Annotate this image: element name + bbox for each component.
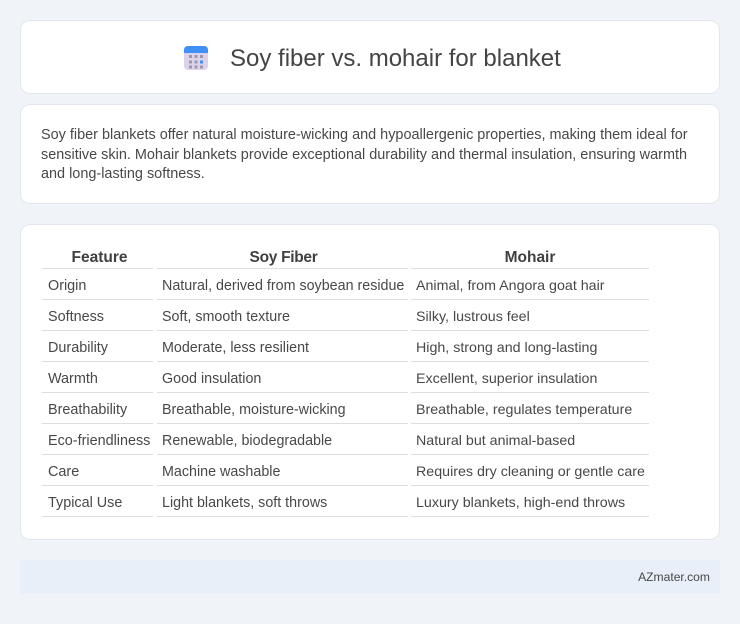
- row: Typical Use: Typical Use: [48, 495, 122, 511]
- row: Softness: [42, 309, 649, 331]
- row: Origin: Natural, derived from soybean residue: [162, 278, 404, 294]
- row: Warmth: Good insulation: [162, 371, 261, 387]
- row: Eco-friendliness: Renewable, biodegradable: [162, 433, 332, 449]
- row: Breathability: Breathable, regulates temperature: [416, 402, 632, 418]
- table header: Soy Fiber: [250, 249, 317, 266]
- row: Care: Care: [48, 464, 79, 480]
- table header: Mohair: [505, 249, 555, 266]
- table header: [42, 249, 649, 269]
- panel: title card: [20, 20, 720, 94]
- row: Softness: Softness: [48, 309, 104, 325]
- row: Origin: Origin: [48, 278, 86, 294]
- table header: Feature: [72, 249, 128, 266]
- row: Durability: [42, 340, 649, 362]
- row: Origin: [42, 278, 649, 300]
- row: Durability: Moderate, less resilient: [162, 340, 309, 356]
- row: Warmth: Excellent, superior insulation: [416, 371, 597, 387]
- row: Durability: Durability: [48, 340, 108, 356]
- row: Durability: High, strong and long-lasting: [416, 340, 597, 356]
- row: Typical Use: Luxury blankets, high-end throws: [416, 495, 625, 511]
- row: Eco-friendliness: Natural but animal-based: [416, 433, 575, 449]
- row: Care: Machine washable: [162, 464, 280, 480]
- summary text: Soy fiber blankets offer natural moisture-wicking and hypoallergenic properties, making them ideal for: [41, 127, 688, 143]
- row: Softness: Soft, smooth texture: [162, 309, 290, 325]
- icon: calendar: [184, 46, 208, 70]
- title: Soy fiber vs. mohair for blanket: [230, 45, 561, 72]
- row: Eco-friendliness: [42, 433, 649, 455]
- row: Eco-friendliness: Eco-friendliness: [48, 433, 150, 449]
- row: Origin: Animal, from Angora goat hair: [416, 278, 605, 294]
- panel: comparison table: [20, 224, 720, 540]
- row: Care: Requires dry cleaning or gentle care: [416, 464, 645, 480]
- row: Typical Use: Light blankets, soft throws: [162, 495, 327, 511]
- summary text: and long-lasting softness.: [41, 166, 205, 182]
- row: Typical Use: [42, 495, 649, 517]
- footer credit: AZmater.com: [638, 570, 710, 584]
- footer bar: [20, 560, 720, 594]
- row: Breathability: Breathability: [48, 402, 127, 418]
- row: Care: [42, 464, 649, 486]
- row: Softness: Silky, lustrous feel: [416, 309, 530, 325]
- summary text: [41, 127, 688, 182]
- row: Breathability: Breathable, moisture-wicking: [162, 402, 346, 418]
- summary text: sensitive skin. Mohair blankets provide exceptional durability and thermal insulation, ensuring warmth: [41, 147, 687, 163]
- row: Warmth: Warmth: [48, 371, 98, 387]
- row: Warmth: [42, 371, 649, 393]
- row: Breathability: [42, 402, 649, 424]
- panel: summary: [20, 104, 720, 204]
